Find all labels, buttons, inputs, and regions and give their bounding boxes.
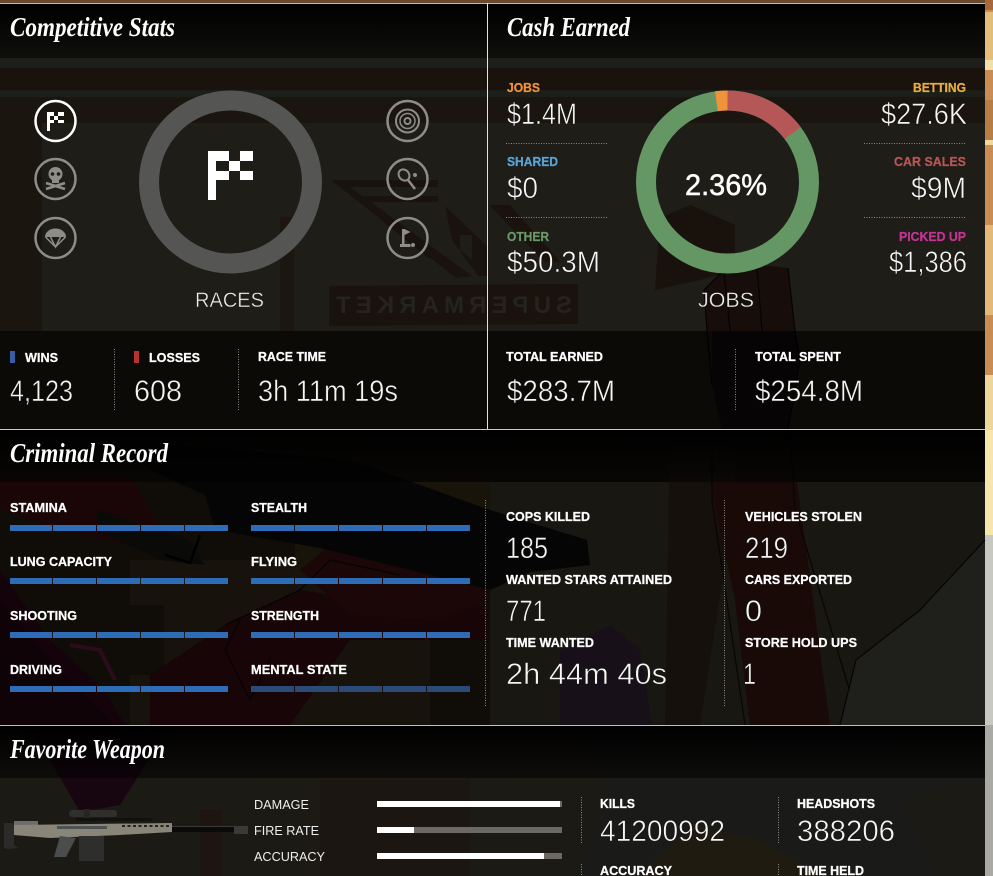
label: races: RACES bbox=[195, 289, 264, 312]
label: jobs: JOBS bbox=[698, 289, 754, 312]
skill: shooting: SHOOTING bbox=[10, 609, 77, 623]
icon: parachute bbox=[36, 218, 76, 258]
panel: criminal record bbox=[10, 438, 862, 707]
panel: favorite weapon bbox=[4, 734, 895, 876]
stat: picked up: $1,386 bbox=[889, 246, 967, 279]
stat: race time bbox=[258, 350, 398, 408]
chart: cash donut bbox=[646, 100, 809, 264]
stat bar: damage bbox=[254, 797, 562, 812]
skill: stealth bbox=[251, 501, 470, 531]
stat: cars exported bbox=[745, 573, 852, 628]
stat: wins: 4,123 bbox=[10, 375, 73, 408]
stat: cops killed: COPS KILLED bbox=[506, 510, 590, 524]
stat: vehicles stolen bbox=[745, 510, 862, 565]
icon: races selected bbox=[36, 101, 76, 141]
stat: wins bbox=[10, 351, 73, 408]
skill: shooting bbox=[10, 609, 228, 638]
stat: other: $50.3M bbox=[507, 246, 600, 279]
stat: car sales: CAR SALES bbox=[894, 155, 966, 169]
stat: picked up bbox=[889, 230, 967, 279]
stat: picked up: PICKED UP bbox=[899, 230, 966, 244]
donut percentage: 2.36% bbox=[685, 169, 767, 202]
stat: cops killed: 185 bbox=[506, 532, 548, 565]
stat: total spent: $254.8M bbox=[755, 375, 863, 408]
stat: kills bbox=[600, 797, 725, 848]
stat: total earned bbox=[506, 350, 615, 408]
stat bar: damage: DAMAGE bbox=[254, 797, 309, 812]
skill: flying bbox=[251, 555, 470, 584]
stat: store hold ups: STORE HOLD UPS bbox=[745, 636, 857, 650]
icon: target bbox=[388, 101, 428, 141]
stat: time wanted: 2h 44m 40s bbox=[506, 658, 667, 691]
stat: time wanted bbox=[506, 636, 667, 691]
stat: wanted stars attained: WANTED STARS ATTAINED bbox=[506, 573, 672, 587]
stat: time wanted: TIME WANTED bbox=[506, 636, 594, 650]
stat: car sales bbox=[894, 155, 966, 205]
stat: cars exported: 0 bbox=[745, 595, 762, 628]
stat: headshots: HEADSHOTS bbox=[797, 797, 875, 811]
stat: vehicles stolen: 219 bbox=[745, 532, 788, 565]
skill: lung capacity: LUNG CAPACITY bbox=[10, 555, 113, 569]
panel: competitive stats bbox=[10, 12, 428, 410]
stat: cars exported: CARS EXPORTED bbox=[745, 573, 852, 587]
skill: driving: DRIVING bbox=[10, 663, 62, 677]
stat: other: OTHER bbox=[507, 230, 549, 244]
stat: wanted stars attained bbox=[506, 573, 672, 628]
stat: jobs bbox=[507, 81, 577, 131]
skill: mental state bbox=[251, 663, 470, 692]
stat: vehicles stolen: VEHICLES STOLEN bbox=[745, 510, 862, 524]
heading: competitive stats: Competitive Stats bbox=[10, 12, 175, 42]
stat: shared: SHARED bbox=[507, 155, 558, 169]
heading: cash earned: Cash Earned bbox=[507, 12, 630, 42]
skill: lung capacity bbox=[10, 555, 228, 584]
stat: total spent: TOTAL SPENT bbox=[755, 350, 841, 364]
icon: sniper rifle bbox=[4, 809, 248, 861]
stat: headshots bbox=[797, 797, 895, 848]
stat bar: accuracy: ACCURACY bbox=[254, 849, 325, 864]
skill: mental state: MENTAL STATE bbox=[251, 663, 347, 677]
icon: golf flag bbox=[388, 218, 428, 258]
stat: shared bbox=[507, 155, 558, 205]
stat: headshots: 388206 bbox=[797, 815, 895, 848]
skill: strength bbox=[251, 609, 470, 638]
icon: tennis bbox=[388, 159, 428, 199]
stat bar: fire rate: FIRE RATE bbox=[254, 823, 319, 838]
skill: flying: FLYING bbox=[251, 555, 297, 569]
stat: total earned: $283.7M bbox=[507, 375, 615, 408]
stat bar: accuracy bbox=[254, 849, 562, 864]
panel: cash earned bbox=[506, 12, 967, 410]
stat: jobs: $1.4M bbox=[507, 98, 577, 131]
stat: betting: BETTING bbox=[913, 81, 966, 95]
stat: store hold ups bbox=[743, 636, 857, 691]
stat: losses bbox=[134, 351, 200, 408]
heading: favorite weapon: Favorite Weapon bbox=[9, 734, 165, 764]
stat: jobs: JOBS bbox=[507, 81, 540, 95]
stat: car sales: $9M bbox=[911, 172, 966, 205]
stat: other bbox=[507, 230, 600, 279]
icon: checkered flag bbox=[208, 151, 253, 200]
heading: criminal record: Criminal Record bbox=[10, 438, 168, 468]
background artwork: SUPERMARKET bbox=[336, 292, 572, 319]
stat: race time: 3h 11m 19s bbox=[258, 375, 398, 408]
stat: total earned: TOTAL EARNED bbox=[506, 350, 603, 364]
skill: stamina: STAMINA bbox=[10, 501, 67, 515]
stat: betting: $27.6K bbox=[881, 98, 967, 131]
stat: kills: 41200992 bbox=[600, 815, 725, 848]
stat: losses: 608 bbox=[134, 375, 182, 408]
skill: driving bbox=[10, 663, 228, 692]
skill: stamina bbox=[10, 501, 228, 531]
stat: wins: WINS bbox=[25, 351, 58, 365]
icon: skull bbox=[36, 159, 76, 199]
stat: shared: $0 bbox=[507, 172, 538, 205]
stat: kills: KILLS bbox=[600, 797, 635, 811]
stat: betting bbox=[881, 81, 967, 131]
stat: cops killed bbox=[506, 510, 590, 565]
stat: race time: RACE TIME bbox=[258, 350, 326, 364]
stat bar: fire rate bbox=[254, 823, 562, 838]
skill: strength: STRENGTH bbox=[251, 609, 319, 623]
stat: store hold ups: 1 bbox=[743, 658, 756, 691]
chart: races ring bbox=[149, 100, 312, 264]
stat: total spent bbox=[755, 350, 863, 408]
stat: wanted stars attained: 771 bbox=[506, 595, 546, 628]
stat: losses: LOSSES bbox=[149, 351, 200, 365]
skill: stealth: STEALTH bbox=[251, 501, 307, 515]
